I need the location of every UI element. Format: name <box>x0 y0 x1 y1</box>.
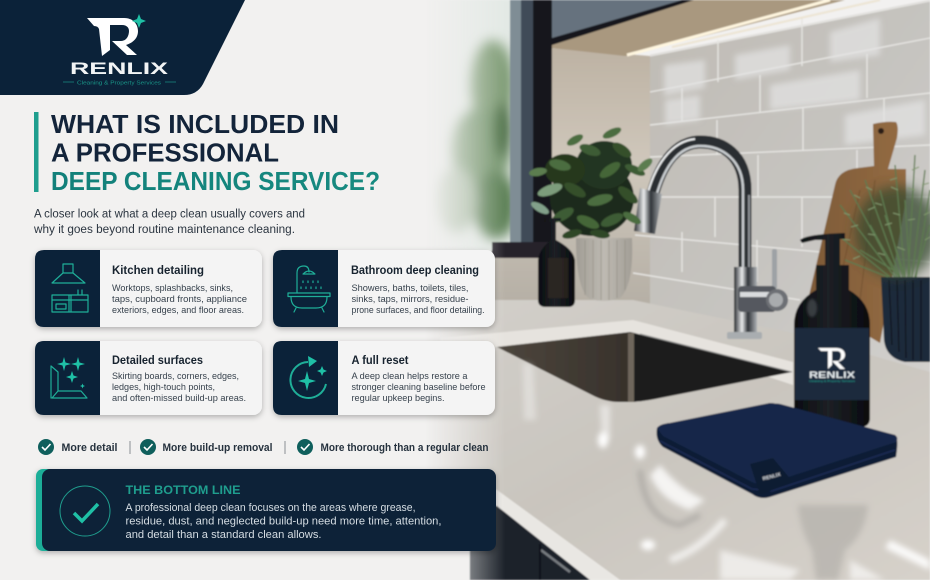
navy microfibre towel: RENLIX <box>762 472 782 482</box>
logo sparkle <box>132 14 146 28</box>
sink <box>440 320 793 402</box>
panel: kitchen detailing: exteriors, edges, and floor areas. <box>112 305 244 315</box>
title: A PROFESSIONAL <box>51 140 279 168</box>
logo tagline <box>63 80 176 86</box>
check item: more detail: More detail <box>62 442 118 454</box>
intro text <box>33 208 305 236</box>
check item: more thorough <box>297 439 488 455</box>
check item: more thorough: More thorough than a regular clean <box>320 442 488 454</box>
large soap bottle with Renlix label: Cleaning & Property Services <box>809 379 856 383</box>
panel: detailed surfaces: Skirting boards, corners, edges, <box>112 371 239 381</box>
plant pot left <box>576 238 632 301</box>
side wall <box>490 48 650 305</box>
logo mark R <box>87 18 138 56</box>
panel: detailed surfaces <box>35 341 262 415</box>
counter front edge <box>496 492 617 580</box>
under-cabinet and light strip <box>552 0 880 56</box>
panel: detailed surfaces: and often-missed build-up areas. <box>112 393 246 403</box>
logo wordmark: RENLIX <box>70 59 169 78</box>
intro text: A closer look at what a deep clean usually covers and <box>34 208 305 220</box>
faucet <box>634 139 788 339</box>
panel: a full reset: stronger cleaning baseline before <box>352 382 486 392</box>
callout: the bottom line: and detail than a standard clean allows. <box>126 529 322 541</box>
panel: detailed surfaces: ledges, high-touch points, <box>112 382 215 392</box>
large soap bottle with Renlix label <box>794 233 870 427</box>
icon: reset arrow with sparkles <box>290 356 327 398</box>
callout: the bottom line: residue, dust, and neglected build-up need more time, attention, <box>126 516 442 528</box>
panel: bathroom deep cleaning: Showers, baths, toilets, tiles, <box>352 283 468 293</box>
check item: more detail <box>38 439 118 455</box>
tiled splashback <box>633 0 930 380</box>
counter top <box>400 300 930 580</box>
herb pot right <box>881 277 930 362</box>
check item: more build-up removal: More build-up removal <box>162 442 273 454</box>
panel: a full reset: regular upkeep begins. <box>352 393 444 403</box>
small dark bottle <box>538 218 575 307</box>
icon: cooker hood and oven <box>52 264 88 312</box>
title: WHAT IS INCLUDED IN <box>51 111 339 139</box>
panel: kitchen detailing: Kitchen detailing <box>112 263 204 277</box>
panel: a full reset: A deep clean helps restore a <box>352 371 468 381</box>
foliage left <box>528 125 654 240</box>
panel: a full reset <box>273 341 495 415</box>
kitchen photo scene <box>400 0 930 580</box>
panel: a full reset: A full reset <box>352 353 408 367</box>
bottle reflection <box>798 505 868 580</box>
panel: kitchen detailing: taps, cupboard fronts, appliance <box>112 294 247 304</box>
callout: the bottom line <box>36 469 496 551</box>
large soap bottle with Renlix label: RENLIX <box>809 370 855 380</box>
title accent bar <box>34 112 38 192</box>
check item: more build-up removal <box>140 439 273 455</box>
title <box>34 111 380 196</box>
logo tagline: Cleaning & Property Services <box>77 80 161 86</box>
panel: bathroom deep cleaning: Bathroom deep cleaning <box>351 263 479 277</box>
window frame and sill <box>492 0 553 258</box>
rosemary foliage <box>838 155 930 278</box>
panel: bathroom deep cleaning: prone surfaces, and floor detailing. <box>352 305 484 315</box>
counter reflections <box>523 362 930 580</box>
window view <box>436 0 522 251</box>
navy microfibre towel <box>657 403 897 498</box>
panel: bathroom deep cleaning: sinks, taps, mirrors, residue- <box>352 294 468 304</box>
wooden cutting board <box>808 122 906 343</box>
callout: the bottom line: A professional deep clean focuses on the areas where grease, <box>126 502 416 514</box>
cabinet below counter <box>470 500 592 580</box>
panel: kitchen detailing <box>35 250 262 327</box>
callout: the bottom line: THE BOTTOM LINE <box>126 483 240 497</box>
panel: detailed surfaces: Detailed surfaces <box>112 353 203 367</box>
icon: shower and bath <box>288 266 330 312</box>
panel: bathroom deep cleaning <box>273 250 495 327</box>
panel: kitchen detailing: Worktops, splashbacks, sinks, <box>112 283 233 293</box>
icon: corner with sparkles <box>51 357 87 398</box>
title: DEEP CLEANING SERVICE? <box>51 168 380 196</box>
logo panel <box>0 0 245 95</box>
checklist row <box>38 439 488 455</box>
intro text: why it goes beyond routine maintenance cleaning. <box>33 224 295 236</box>
icon: check circle <box>60 486 110 536</box>
